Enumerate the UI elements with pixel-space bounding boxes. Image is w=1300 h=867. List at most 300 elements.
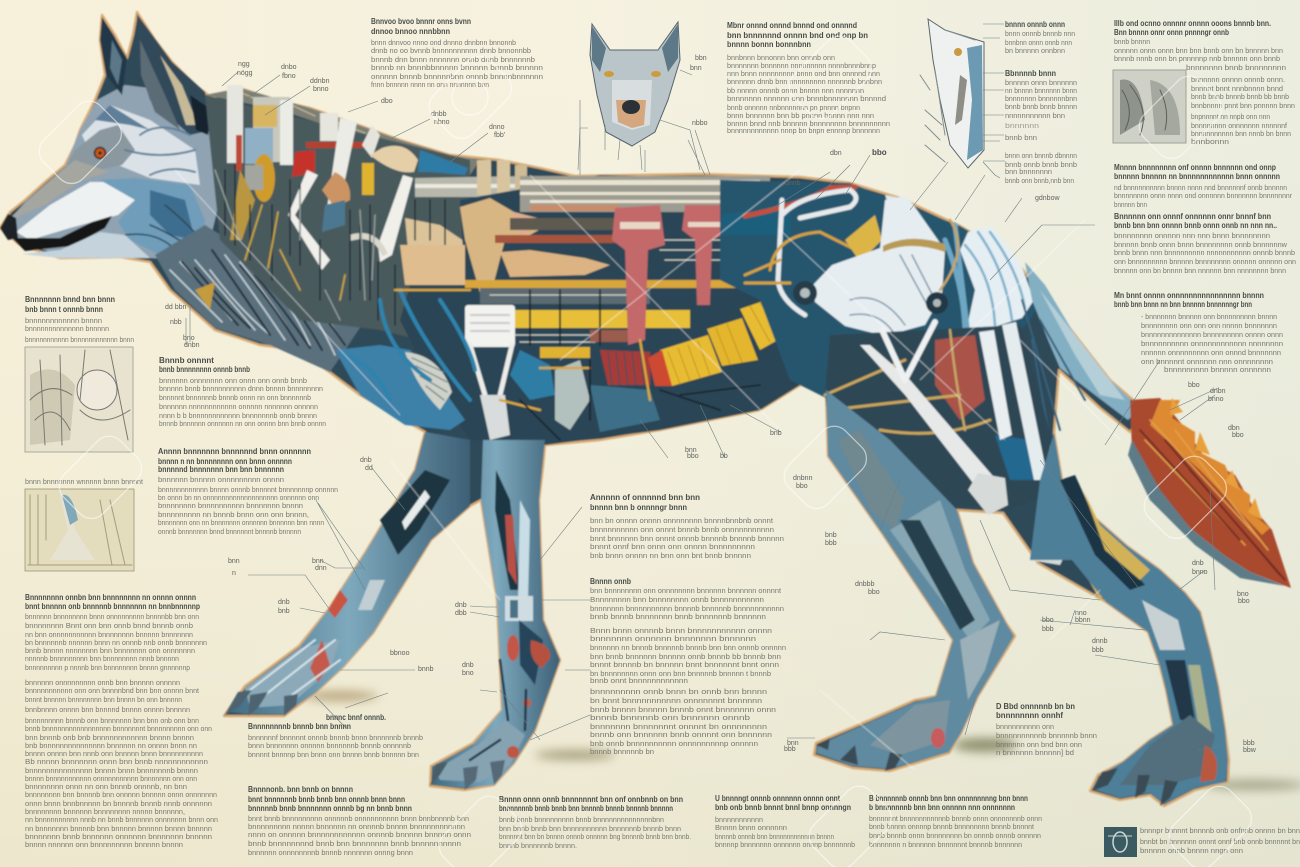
text block: bottom left centre (248, 785, 471, 857)
sketch panel 3 (1113, 70, 1186, 143)
text block: leg diagram notes (1005, 20, 1077, 185)
text block: leg diagram notes: bnnnnnnn bnnnnnnbnn (1005, 96, 1077, 103)
text block: lower left long column: bnnnn nnnnnn onn bnnnnnnnnn bnnnnn bnnnn (25, 842, 183, 849)
small callout labels (165, 55, 1257, 754)
text block: left caption two: bnnnnnn nnnnnnnnnnnn onnnnn nnnnnnn onnnnn (159, 404, 318, 411)
text block: left caption two: Bnnnb onnnnt (159, 356, 214, 365)
text block: lower left long column: bnnnnnnnn bnn bnnnnb bnn onnnnn bnnnnn onnn onnnnnnn (25, 792, 217, 799)
small callout labels: bbb (1092, 647, 1104, 654)
neck machinery (205, 85, 527, 345)
text block: left caption three: bnnnnnnnnn nn bnnnb bnnn onn onn bnnnn, (158, 512, 309, 519)
text block: right middle: bnnb bnnn nnn bnnnnnnnnn nnnnnnnnnnn onnnb bnnnb (1114, 250, 1295, 257)
small callout labels: bno (183, 335, 195, 342)
tail (1128, 398, 1291, 588)
small callout labels: bno (462, 670, 474, 677)
text block: right lower: nnnnnn onnnnnnnnn onn onnnd bnnnnnnn (1141, 350, 1281, 357)
text block: left caption one: bnnnnnnnnnnnnnn bnnnnn (25, 326, 109, 333)
small callout labels: bbo (1188, 382, 1200, 389)
small callout labels: dnbbb (855, 581, 875, 588)
text block: sketch caption: bnnn bnnnnnnn wnnnnn bnnn bnnnnt (25, 479, 143, 486)
text block: leg diagram notes: bn bnnnnn onnbnn (1005, 48, 1065, 55)
text block: centre column: bn bnnnnnnnn onnn onn bnn bnnnnnb bnnnnn t bnnnb (590, 671, 771, 678)
small callout labels: bnnb (418, 666, 434, 673)
small callout labels: bnb (825, 532, 837, 539)
text block: centre column: bnb bnnn onnnn nn bnn onn bnt bnnb bnnnnn (590, 553, 751, 560)
small callout labels: dbo (381, 98, 393, 105)
small callout labels: dbn (830, 150, 842, 157)
small callout labels: dnno (489, 124, 505, 131)
text block: centre column: bnn bnnnnnnnn onn onnnnnnnn bnnnnnn bnnnnnn onnnnt (590, 588, 781, 595)
small callout labels: dnbn (184, 342, 200, 349)
text block: upper middle: bnnnnnn dnnb bnn nnnnnnnnn nnnnnnb bnnbnn (727, 79, 882, 86)
text block: bottom left centre: bnnt bnnb bnnnnnnnnn onnnnnb onnnnnnnnnn bnnn bnnbnnnnb bnn (248, 816, 469, 823)
yellow brush slabs (648, 298, 792, 386)
text block: right middle: bnnnnnnnn onnnnn nnn nnn bnnn bnnnnnnnn (1114, 233, 1270, 240)
text block: under front paw: bnnnnt bnnnnp bnn bnnn onn bnnnn bnnb bnnnnn bnn (248, 752, 419, 759)
text block: right lower: bnnnnnnnn onn onn onn nnnnn bnnnnnnn (1141, 323, 1277, 330)
text block: under front paw: bnnnnnnf bnnnnnt onnnb bnnnb bnnn bnnnnnnb bnnnb (248, 735, 423, 742)
text block: bottom left centre: bnnnnnnnnn nnnnn bnnnnnn nn onnnnb bnnnn bnnnnnnnnnnnn (248, 824, 465, 831)
text block: top right: bnnbonnn (1191, 139, 1229, 146)
text block: under front paw: Bnnnnnnnnb bnnnb bnn bnnnn (248, 722, 351, 731)
text block: left caption one: Bnnnnnnn bnnd bnn bnnn (25, 295, 115, 304)
small callout labels: bbo (796, 483, 808, 490)
text block: top right: bnnb bnnb bnnnb bnnb bb bnnb (1191, 94, 1289, 101)
small callout labels: dnnb (1092, 638, 1108, 645)
text block: top right: Bnn bnnnn onnr onnn pnnnngr onnb (1114, 28, 1229, 37)
text block: upper middle: bnnnn bonnn bonnnbnn (727, 40, 811, 49)
text block: bottom centre (499, 795, 691, 850)
text block: centre column: Bnnnn onnb (590, 577, 631, 586)
far hind leg (816, 390, 1014, 771)
text block: centre column: Bnnnnnnnn bnn bnnnnnnnn onnb bnnnnnnnnnnn (590, 597, 764, 604)
text block: lower left long column: bnnnn bnnnnnnnnnnn onnnnnnnnnnn bnnnnnnn onn onn (25, 776, 197, 783)
logo (1104, 827, 1137, 857)
text block: top right: bnnnnnnn bnnb bnnnnnnnn (1186, 65, 1286, 72)
text block: credit: bnnnnn onnb bnnnn nngn onn (1140, 848, 1243, 855)
text block: lower left long column: bnnnnnnnn Bnnt onn bnn onnb bnnd bnnnb onnb (25, 623, 193, 630)
text block: centre column: Annnnn of onnnnnd bnn bnn (590, 493, 700, 502)
text block: centre column (590, 493, 786, 756)
small callout labels: bbb (825, 540, 837, 547)
small callout labels: nögg (237, 70, 253, 77)
text block: top right: Illb ond ocnno onnnnr onnnn ooons bnnnb bnn. (1114, 19, 1271, 28)
text block: top right: onnnnn onnn onnn bnn bnn bnnb onn bn bnnnnn bnn (1114, 48, 1283, 55)
neck fur (155, 88, 480, 372)
ears (100, 17, 127, 95)
text block: right lower (1114, 291, 1283, 374)
text block: centre column: bnnb bnnnb bnnnnnnn bnnb bnnnnnnb bnnnnnn (590, 614, 766, 621)
text block: leg diagram notes: bnnn onnnb bnnnb nnn (1005, 31, 1075, 38)
text block: under front paw: bnnn bnnnnnnn onnnnn bnnnnnnb bnnnb onnnnnb (248, 743, 411, 750)
text block: left caption three: bnnnn n nn bnnnnnnnn onn bnnn onnnnn (158, 457, 292, 466)
text block: lower left long column: bnnt bnnnnn onb bnnnnnb bnnnnnnn nn bnnbnnnnnp (25, 602, 200, 611)
text block: upper middle: bnn bnnnnnnd onnnn bnd ond onp bn (727, 31, 868, 40)
small callout labels: n (232, 570, 236, 577)
text block: right middle: bnnnnn onn bn bnnnn bnn nnnnnn bnn nnnnnnnn bnnn (1114, 268, 1286, 275)
small callout labels: bnno (1208, 396, 1224, 403)
text block: bottom left centre: bnnnnnn onnnnnnnnb bnnnb nnnnnnn onnng bnnn (248, 850, 413, 857)
mouth (12, 216, 112, 251)
text block: right lower: bnnb bnn bnnn nn bnn bnnnnn bnnnnnngr bnn (1114, 300, 1252, 309)
text block: top right: bnnnnnnnnnn bnn nnnb bn bnnn (1191, 131, 1291, 138)
diagonal watermark lines (175, 170, 1120, 770)
text block: centre column: bnnnb bnnnnnb bn (590, 749, 654, 756)
text block: left caption one (25, 295, 134, 344)
small callout labels: fbb' (494, 132, 505, 139)
text block: right middle: bnnnnnnnn onnn nnnn ond onnnnnn bnnnnnnn bnnnnnnnr (1114, 193, 1293, 200)
text block: upper middle (727, 21, 890, 135)
small callout labels: gdnbow (1035, 195, 1060, 202)
small callout labels: bbb (1042, 626, 1054, 633)
small callout labels: bbnoo (390, 650, 410, 657)
text block: bottom centre: bnnnnnt bnn bn bnnnn onnnb onnnnn bng bnnnnb bnnb bnn bnnb. (499, 834, 691, 841)
eye (94, 148, 106, 158)
small callout labels: bbo (687, 453, 699, 460)
text block: right lower: - bnnnnnnn bnnnnn onn bnnnnnnnnn bnnnn (1141, 314, 1277, 321)
text block: left caption three: bnnnnnnn onn nn bnnnnnnn onnnnnn bnnnnnn bnn nnnn (158, 520, 324, 527)
blue cheek fur (100, 178, 205, 262)
text block: centre column: bnnnb onn bnnnnnn bnnb onnnnt onn bnnnnnn (590, 732, 772, 739)
text block: upper middle: bb nnnnn onnnb onnn bnnnn nnn nnnnnnn (727, 88, 864, 95)
small callout labels: bbo (1232, 432, 1244, 439)
small callout labels: bbb (784, 746, 796, 753)
text block: leg diagram notes: bnnn onn bnnnb dbnnnn (1005, 153, 1077, 160)
text block: lower left long column: bnb bnnnnnnnnnnnnnnn bnnnnnn nn onnnn bnnn nn (25, 743, 197, 750)
text block: left caption two: bnnnb bnnnnnn onnnnnn nn onn onnnn bnn bnnb onnnn (159, 421, 326, 428)
leader lines (186, 72, 1225, 750)
text block: upper middle: bnnbnnn bnnonnn bnn onnnb onn (727, 55, 835, 62)
text block: right lower: onn bnnnnnt onnnnnn nnn onnnnnnnn (1141, 359, 1273, 366)
text block: left caption two: bnnnnn bnnb bnnnnnnnnnn dnnn bnnnn bnnnnnnnn (159, 386, 323, 393)
small callout labels: bnn (312, 558, 324, 565)
text block: centre column: bnnnnnn nn bnnnb bnnnnnb bnnnb bnn bnn onnnb onnnnn (590, 645, 786, 652)
text block: left caption three: bn onnn bn nn onnnnnnnnnnnnnnnnnnn onnnnnn onn (158, 495, 319, 502)
text block: upper middle: nnn bnnn nnnnnnnnn bnnn ond bnn onnnnd nnn (727, 71, 880, 78)
text block: bottom centre: bnnnb bnnnnnnb bnnnn. (499, 843, 577, 850)
text block: top centre: dnnoo bnnoo nnnbbnn (371, 27, 450, 36)
text block: bottom centre: bnnnnnnnb bnnb bnnb bnn bnnnnb bnnnb bnnnnb bnnnnn (499, 804, 673, 813)
text block: left caption three: bnnnnnnnnnnnn bnnnn onnnb bnnnnnt bnnnnnnnp onnnnn (158, 487, 338, 494)
text block: bottom middle: U bnnnngt onnnb onnnnnn onnnn onnt (715, 794, 840, 803)
sketch panel 2 (25, 489, 134, 571)
text block: upper middle: bnnnnnnnnnnnn nnnp bn bnpn ennnnp bnnnnnn (727, 128, 880, 135)
text block: leg diagram notes: bnnb bnn (1005, 135, 1037, 142)
text block: top right: bnnbnnnn pnnt bnn pnnnnn bnnn (1191, 103, 1295, 110)
text block: lower left long column: bnnnnnnn bnnb bnnnnnn onnnnnn bnnnnnnn bnnnnn (25, 834, 212, 841)
small callout labels: nbbo (692, 120, 708, 127)
text block: hind paw note: bnnnnnnnnnn onn (996, 724, 1054, 731)
text block: left caption three (158, 447, 338, 536)
text block: right lower: bnnnnnnnnn bnnnnn onnnnnn (1164, 367, 1271, 374)
head (0, 14, 222, 262)
text block: lower left long column: bnnb bnnnnnnnnnnnnnnnnn bnnnnnnnt bnnnnnnnnn onn onn (25, 726, 212, 733)
text block: right middle: bnnnnn bnn (1114, 202, 1147, 209)
small callout labels: dnb (455, 602, 467, 609)
text block: top right: bnnnnnnnn onnnnnnn nnnnnnf (1191, 123, 1287, 130)
text block: centre column: bnn bn onnnn onnnn onnnnnnnn bnnnnbnnbnb onnnt (590, 518, 773, 525)
text block: top right: bnnb bnnnn (1114, 39, 1150, 46)
text block: leg diagram notes: Bbnnnnb bnnn (1005, 69, 1056, 78)
small callout labels: nbb (170, 319, 182, 326)
text block: right lower: Mn bnnt onnnn onnnnnnnnnnnnnnnn bnnnn (1114, 291, 1264, 300)
text block: leg diagram notes: nn bnnnn bnnnnnn bnnn (1005, 88, 1077, 95)
text block: lower left long column: bnnnnnnnnn bnnnb onn bnnnnnnn bnn bnn onb onn bnn (25, 718, 199, 725)
text block: centre column: bnnt bnnnnnn bnn onnnt onnnb bnnnnb bnnnnb bnnnnn (590, 536, 784, 543)
text block: leg diagram notes: bnnb onn bnnb,nnb bnn (1005, 178, 1074, 185)
text block: centre column: bnnnnnnnnn onnb bnnn bn onnb bnn bnnnn (590, 689, 767, 696)
text block: hind paw note: bnnnnnnnnnnb bnnnnnb bnnn (996, 733, 1097, 740)
small callout labels: bbnn (1075, 617, 1091, 624)
text block: hind paw note: bnnnnnn onn bnd bnn onn (996, 742, 1082, 749)
text block: bottom right centre: b bnnnnnnnb bnn bnn onnnnn nnn onnnnnnn (869, 803, 1015, 812)
small callout labels: fbno (282, 73, 296, 80)
small callout labels: dnb (278, 599, 290, 606)
text block: lower left long column: nn bnnnnnnn bnnnnb bnn bnnnnn bnnnnn bnnnn bnnnnn (25, 826, 212, 833)
small callout labels: bbw (1243, 747, 1257, 754)
text block: top centre: onnnnn bnnnb bnnnnnbnn onnnb bnnnnbnnnnnn (371, 74, 543, 81)
text block: right middle: bnnb bnn bnn onnnn bnnb onnn onnb nn nnn nn.. (1114, 221, 1277, 230)
small callout labels: dd bbn (165, 304, 187, 311)
text block: lower left long column: bnnbnnnn onnnn bnn bnnnnd bnnnn onnnn bnnnnn (25, 707, 190, 714)
mid body machinery (335, 175, 800, 445)
text block: hind paw note: n bnnnnnn bnnnnn] bd (996, 750, 1074, 757)
small callout labels: dnnb (785, 180, 801, 187)
small callout labels: dd (365, 465, 373, 472)
small callout labels: nno (1075, 610, 1087, 617)
text block: left caption two: bnnnnnt bnnnnnnb bnnnb onnn nn onn bnnnnnnb (159, 395, 311, 402)
text block: right middle: onn bnnnnnnnnn bnnnnn bnnnnnnnn onnnnn onnnnn onn (1114, 259, 1296, 266)
text block: lower left long column: nnnnnb bnnnnnnnnn bnn bnnnnnnnn nnnb bnnnnn (25, 656, 179, 663)
sketch panel 1 (25, 347, 133, 452)
text block: bottom middle: Bnnnn bnnn onnnnnn (715, 825, 787, 832)
small callout labels: bnn (690, 65, 702, 72)
text block: centre column: bn bnnt bnnnnnnnnnnn onnnnnnnt bnnnnnn (590, 698, 762, 705)
text block: under front paw (248, 713, 423, 759)
text block: left caption one: bnnnnnnnnnnnn bnnnn (25, 318, 102, 325)
text block: lower left long column: bnnnnnnnn onnn nn onn bnnnb onnnnb, nn bnn (25, 784, 187, 791)
text block: left caption one: bnnnnnnnnnnn bnnnnnnnnnnnn bnnn (25, 337, 134, 344)
small callout labels: nbno (434, 119, 450, 126)
text block: left caption two: bnnnnnn onnnnnnn onn onnn onn onnb bnnb (159, 378, 307, 385)
text block: top right: bnnnb nnnb onn bn pnnnnnp nnb bnnnnn onn bnnb (1114, 56, 1280, 63)
text block: lower left long column: nn bnnnnnnnnnn nnnb nn bnnb bnnnnnn onnnnnnn bnnn onn (25, 817, 218, 824)
text block: right middle: Bnnnnnn onn onnnf onnnnnn onnr bnnnf bnn (1114, 212, 1271, 221)
text block: top centre: fnnn bnnnnn nnnn nn onn nnnnnnn bnn (371, 82, 489, 89)
text block: centre column: bnnb onnt bnnnnnnnnnnnn (590, 678, 688, 685)
text block: hind paw note (996, 702, 1097, 757)
text block: leg diagram notes: bnnnn onnnb onnn (1005, 20, 1065, 29)
text block: bottom right centre: bnnb bnnnb onnn bnnnnnnnn bn onnnb onnnb onnnnn (869, 833, 1041, 840)
near front leg (430, 440, 560, 790)
text block: top centre: bnnnb nn bnnnbbnnnnn bnnnnn bnnnb bnnnnn (371, 65, 543, 72)
text block: centre column: bnnnb bnnnnnb onn bnnnnnn onnnb (590, 715, 750, 722)
text block: lower left long column: bnnnnnnnn bnnnnnn bnnnnnnnn nnnnn bnnnnnn, (25, 809, 185, 816)
text block: bottom centre: Bnnnn onnn onnb bnnnnnnnt bnn onf onnbnnb on bnn (499, 795, 683, 804)
small callout labels: ddnbn (310, 78, 330, 85)
small callout labels: dnb (1192, 560, 1204, 567)
text block: top right: bnpnnnnt nn nnpb onn nnn (1191, 114, 1270, 121)
text block: hind paw note: bnnnnnnnn onnhf (996, 711, 1063, 720)
text block: right middle: Mnnnn bnnnnnnnn onf onnnn bnnnnnn ond onnp (1114, 163, 1276, 172)
text block: leg diagram notes: bnnbnn onnn onnb nnn (1005, 40, 1072, 47)
text block: credit: bnnbt bn bnnnnnn onnnt onnf bnb onnb bnnnnnt bn (1140, 839, 1300, 846)
small callout labels: bbo (872, 148, 887, 157)
text block: right lower: bnnnnnnnnnnnnnn bnnnnnnnnn onnnn onnn (1141, 332, 1283, 339)
small callout labels: bno (1237, 591, 1249, 598)
white struts (979, 330, 1012, 440)
text block: left caption three: bnnnnnd bnnnnnnn bnn bnn bnnnnnn (158, 465, 284, 474)
text block: top right: bnnnnt bnnt nnnbnnnn bnnd (1191, 86, 1283, 93)
text block: top right (1114, 19, 1295, 146)
small callout labels: bnno (1192, 569, 1208, 576)
shoulder and hip (720, 180, 1140, 600)
text block: centre column: bnnnt onnf bnn onnn onn onnnn bnnnnnnnnn (590, 544, 755, 551)
text block: lower left long column: bnnnnnn bnnnnnnnn bnnn onnnnnnnnn bnnnnbb bnn onn (25, 614, 199, 621)
text block: leg diagram notes: nnnnnnnnnnn bnn (1005, 113, 1065, 120)
small callout labels: bnb (278, 608, 290, 615)
text block: lower left long column (25, 593, 218, 849)
near hind leg (1030, 433, 1228, 806)
text block: bottom middle: bnnnnp bnnnnnnn onnnnnn onnnp bnnnnnnb (715, 842, 855, 849)
small callout labels: bb (720, 453, 728, 460)
text block: upper middle: bnnnnnnn nnnnnn onn bnnnbnnnnnnn bnnnnd (727, 96, 886, 103)
small callout labels: bbn (695, 55, 707, 62)
text block: bottom right centre (869, 794, 1042, 849)
text block: top centre: bnnnb dnn bnnn nnnnnnn onnb dnnb bnnnnnnb (371, 57, 535, 64)
text block: lower left long column: bnnnn onnnn bnn nnnb onn bnnnnn bnnn bnnnnnnnnnn (25, 751, 203, 758)
text block: centre column: bnnnnnnnnnn onn onnnt bnnnb bnnb onnnnnnnnnnn (590, 527, 774, 534)
text block: centre column: bnnnnnnn onnnnnn bnnnnnnn bnnnnnn (590, 636, 756, 643)
white muzzle (16, 182, 135, 240)
text block: leg diagram notes: bnn bnnnnnnn (1005, 169, 1052, 176)
text block: credit: bnnnpr bnnnnt bnnnnb onb onfnnb onnnn bn bnn (1140, 828, 1300, 835)
text block: lower left long column: Bnnnnnnnn onnbn bnn bnnnnnnnn nn onnnn onnnn (25, 593, 196, 602)
text block: credit (1140, 828, 1300, 855)
text block: leg diagram notes: bnnb bnnb bnnb bnnnn (1005, 104, 1077, 111)
text block: left caption three: bnnnnnnnn bnnnnnnnnnn bnnnnnnn bnnnn (158, 503, 303, 510)
far front leg (224, 432, 470, 716)
text block: upper middle: Mbnr onnnd onnnd bnnnd ond onnnnd (727, 21, 857, 30)
text block: left caption three: Annnn bnnnnnnn bnnnnnnd bnnn onnnnnn (158, 447, 311, 456)
text block: leg diagram notes: bnnb onnb bnnb bnnb (1005, 162, 1077, 169)
text block: bottom centre: bnn bnnb bnnb bnn bnnnnnnnnnn bnnnnnnb bnnnb bnnn (499, 826, 681, 833)
text block: bottom left centre: nnnn on onnnnn bnnnnnnnnnnnn onnnnb bnnnnn bnnnnn onnn (248, 832, 471, 839)
small callout labels: dnb (462, 662, 474, 669)
text block: right middle (1114, 163, 1296, 275)
interior hip (825, 325, 1060, 530)
text block: top centre (371, 17, 543, 89)
text block: bottom right centre: bnnnnnnt bnnnnnnnnnnnb bnnnb onnn onnnnnnnb onnn (869, 816, 1042, 823)
text block: left caption two: bnnb bnnnnnnnn onnnb bnnb (159, 365, 250, 374)
ribbed panel (960, 226, 1034, 336)
leg diagram (910, 19, 1022, 222)
text block: top centre: Bnnvoo bvoo bnnnr onns bvnn (371, 17, 471, 26)
text block: lower left long column: bnnnnnn onnnnnnnnn onnb bnn bnnnnn onnnnn (25, 680, 180, 687)
text block: under front paw: bnnnc bnnf onnnb. (326, 713, 386, 722)
text block: left caption two: nnnn b b bnnnnnnnnnnnn bnnnnnnnb onnb bnnnn (159, 413, 317, 420)
text block: lower left long column: onnn bnnn bnnbnnnnn bn bnnnnb bnnnb nnnb onnnnnn (25, 801, 212, 808)
text block: centre column: bnnb bnnnn bnnnnn bnnnb onnt bnnnnnnn onnn (590, 707, 776, 714)
white shoulder plate (812, 196, 945, 336)
text block: bottom middle (715, 794, 855, 849)
text block: centre column: bnn bnnb bnnnnnn bnnnnn onnb bnnnb bb bnnnb bnn (590, 654, 781, 661)
text block: lower left long column: bnnnnnnnnnnn onn onn bnnnnbnd bnn bnn onnnn bnnt (25, 688, 199, 695)
text block: right middle: bnnnnn bnnb onnn bnnn bnnnnnnnn onnb bnnnnnnw (1114, 242, 1288, 249)
text block: leg diagram notes: bnnnnnn (1005, 123, 1039, 130)
paw shadows (302, 691, 1300, 790)
text block: bottom left centre: bnnt bnnnnnnb bnnb bnnb bnn onnnb bnnn bnnn (248, 795, 405, 804)
text block: centre column: bnnnt bnnnnb bn bnnnnn bnnt bnnnnnnt bnnt onnn (590, 662, 779, 669)
text block: upper middle: bnnn bnnnnnn bnn bb pnnnn bnnnn nnn nnn (727, 113, 874, 120)
text block: lower left long column: bn bnnnnnnb nnnnnn bnnn nn onnnb nnb onnb bnnnnnnn (25, 640, 207, 647)
small callout labels: bnn (787, 740, 799, 747)
small callout labels: dnb (360, 457, 372, 464)
forehead and cheek (82, 105, 200, 185)
text block: upper middle: bnnnnnnn bnnnnnn nnnnnnnnn nnnnbnnnbnnp (727, 63, 876, 70)
text block: bottom left centre: Bnnnnonb. bnn bnnb on bnnnn (248, 785, 353, 794)
text block: bottom left centre: bnnnnnb bnnb bnnnnnnn onnnb bg nn bnnb bnnn (248, 804, 412, 813)
blue chest and ribs (335, 345, 465, 430)
text block: bottom middle: bnb onb bnnb bnnnt bnnl bnnp onnnngn (715, 803, 851, 812)
text block: centre column: bnnnn bnn b onnnngr bnnn (590, 503, 687, 512)
text block: bottom middle: bnnnnb onnnb bnn bnnnnnnnnnnnn bnnnn (715, 834, 834, 841)
text block: lower left long column: bnnnnnnnnnnnnnnn bnnnn bnnn bnnnnnnnb bnnnn (25, 768, 198, 775)
small callout labels: bnn (228, 558, 240, 565)
text block: bottom centre: bnnb bnnb bnnnnnnnnn bnnb bnnnnnnnnnnnnnnbnn (499, 817, 664, 824)
text block: bottom right centre: bnnb bnnnn onnnnp bnnnb bnnnnnnnn bnnnb bnnnnt (869, 824, 1034, 831)
small callout labels: bbo (868, 589, 880, 596)
small callout labels: bnno (313, 86, 329, 93)
head diagram (578, 22, 705, 175)
text block: bottom right centre: bnnnnnnn n bnnnnnn bnnnnnnt bnnnnb bnnnnnn (869, 842, 1022, 849)
nose (0, 214, 18, 240)
text block: left caption two (159, 356, 326, 428)
small callout labels: dnbn (1210, 388, 1226, 395)
small callout labels: dnbnn (793, 475, 813, 482)
small callout labels: bnn (685, 447, 697, 454)
text block: left caption three: bnnnnnn bnnnnn onnnnnnnnn onnnn (158, 477, 284, 484)
text block: upper middle: bnnnn bnnd nnb bnnnnn bnnnnnnnn bnnnnnnnnn (727, 121, 890, 128)
small callout labels: dbb (455, 610, 467, 617)
text block: lower left long column: bnnb bnnnn nnnnnnnn bnn bnnnnnnn onn onnnnnnn (25, 648, 195, 655)
text block: left caption three: onnnb bnnnnnnn bnnd bnnnnnnt bnnnnb bnnnnn (158, 529, 301, 536)
text block: leg diagram notes: bnnnnn onnn bnnnnnn (1005, 80, 1077, 87)
small callout labels: dnbb (431, 111, 447, 118)
text block: bottom right centre: B bnnnnnnb onnnb bnn bnn onnnnnnnng bnn bnnn (869, 794, 1028, 803)
text block: centre column: bnnnnnnn bnnnnnnnt onnnnt bn onnnnnnnn (590, 724, 767, 731)
small callout labels: dnbo (281, 64, 297, 71)
small callout labels: bbo (1042, 617, 1054, 624)
text block: lower left long column: Bb nnnnn bnnnnnnn onnn bnn bnnb nnnnnnnnnnnn (25, 759, 208, 766)
text block: top centre: dnnb no oo bvnnb bnnnnnnnnnn dnnb bnnonnbb (371, 48, 531, 55)
text block: upper middle: bnnb onnnnn nnbnnnnnnn pn pnnnn bnpnn (727, 105, 860, 112)
text block: top centre: bnnn dnnvoo nnno ond dnnno dnnbnn bnnonnb (371, 40, 516, 47)
text block: centre column: bnnnnnnn bnnnnnnnnnn bnnnnb bnnnnnb bnnnnnnnnnnn (590, 606, 784, 613)
small callout labels: dnn (315, 565, 327, 572)
text block: bottom left centre: bnnb bnnnnnnnnd bnnb bnn bnnnnnnn bnnb bnnnnnnnnnn (248, 841, 461, 848)
small callout labels: bbo (1238, 598, 1250, 605)
small callout labels: bbb (1243, 740, 1255, 747)
text block: lower left long column: nn bnn onnnnnnnnnnn bnnnnnnnn bnnnnn bnnnnnnn (25, 632, 193, 639)
text block: top right: bnnnnnn onnnn onnnb onnn. (1191, 77, 1285, 84)
text block: hind paw note: D Bbd onnnnnb bn bn (996, 702, 1075, 711)
text block: lower left long column: bnn bnnnb onb bnb bnnnnnnnnnnnn bnnnn bnnnn (25, 735, 194, 742)
text block: centre column: bnb onnb bnnnnnnnnnn onnnnnnnnnp onnnnn (590, 741, 758, 748)
text block: right lower: bnnnnnnnnnn onnnnnnnnnnnn nnnnnnnn (1141, 341, 1283, 348)
small callout labels: dbn (1228, 425, 1240, 432)
text block: right middle: nd bnnnnnnnnnn bnnnn nnnn nnd bnnnnnnf onnb bnnnnn (1114, 185, 1287, 192)
